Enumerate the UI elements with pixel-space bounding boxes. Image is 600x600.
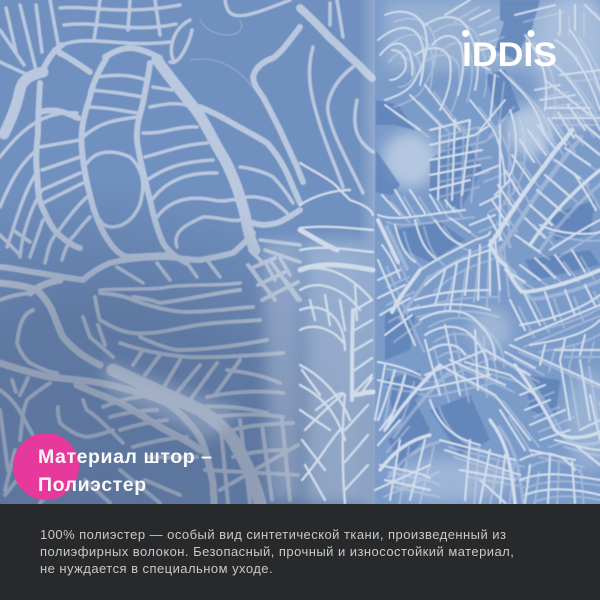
leaves at centre [378,120,600,395]
right curtain panel base [375,0,600,504]
description panel [0,504,600,600]
leaf pattern on left curtain panel, upper part [0,0,373,290]
description text: полиэфирных волокон. Безопасный, прочный и износостойкий материал, [40,544,514,559]
dark leaf patches on right panel [376,0,600,470]
description text: 100% полиэстер — особый вид синтетической ткани, произведенный из [40,527,506,542]
leaf pattern on the sheer right side of the left panel [300,163,373,503]
heading: Материал штор – [38,446,213,468]
light haze at centre of the cloth [100,240,300,500]
diagonal hatched leaf [488,105,600,252]
lower leaves [375,350,600,503]
denser repeat of the sheer leaf pattern [382,6,600,504]
description text [40,527,514,576]
pink circle accent [13,433,79,500]
lower-left shadow on the cloth [0,0,375,504]
top concentric rings [378,0,600,185]
leaf pattern on right curtain panel [375,0,600,503]
IDDIS logo: ® [557,31,562,38]
sheer lighter area at lower part of left panel [305,240,367,504]
pale sheer patches on right panel [382,0,600,502]
leaf pattern on left curtain panel, lower part [0,250,300,503]
heading: Полиэстер [38,474,147,496]
heading [38,446,213,496]
fold between curtain panels [358,0,375,504]
description text: не нуждается в специальном уходе. [40,561,273,576]
